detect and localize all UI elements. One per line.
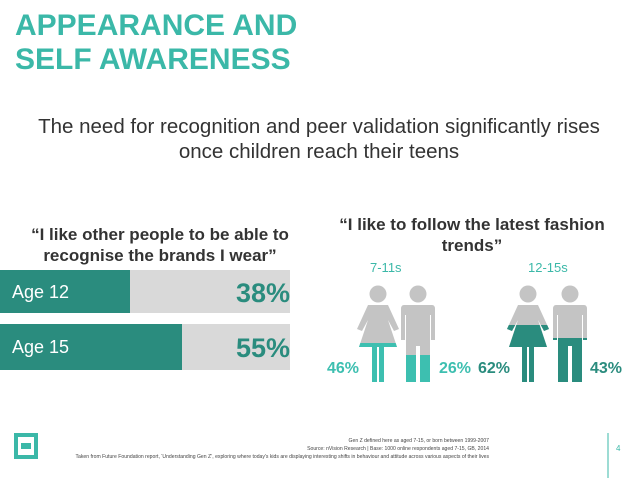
percentages: 62% [478, 360, 510, 377]
quote left: “I like other people to be able to recognise the brands I wear” [31, 225, 289, 265]
logo [14, 433, 38, 459]
quote right: “I like to follow the latest fashion trends” [339, 215, 605, 255]
subtitle: The need for recognition and peer validation significantly rises [38, 115, 600, 138]
percentages: 26% [439, 360, 471, 377]
figure girl 7-11 [357, 286, 399, 382]
footnotes [76, 438, 489, 460]
footnotes: Gen Z defined here as aged 7-15, or born between 1999-2007 [349, 438, 489, 444]
text: 12-15s [528, 260, 568, 275]
bar: age 12 [0, 270, 290, 313]
bar: age 12: Age 12 [12, 282, 69, 302]
title: SELF AWARENESS [15, 43, 291, 76]
figure boy 7-11 [401, 286, 435, 382]
title [15, 9, 297, 76]
footnotes: Source: nVision Research | Base: 1000 online respondents aged 7-15, GB, 2014 [307, 446, 489, 452]
bar: age 15 [0, 324, 290, 370]
title: APPEARANCE AND [15, 9, 297, 42]
subtitle: once children reach their teens [179, 140, 459, 163]
page number: 4 [616, 444, 620, 453]
age labels: 7-11s [370, 260, 402, 275]
bar: age 15: 55% [236, 333, 290, 363]
figure girl 12-15 [507, 286, 549, 382]
subtitle [38, 115, 600, 163]
bar: age 15: Age 15 [12, 337, 69, 357]
percentages: 46% [327, 360, 359, 377]
bar: age 12: 38% [236, 278, 290, 308]
percentages [327, 360, 622, 377]
figures chart [14, 286, 622, 478]
percentages: 43% [590, 360, 622, 377]
figure boy 12-15 [553, 286, 587, 382]
footnotes: Taken from Future Foundation report, ‘Understanding Gen Z’, exploring where today's kids are displaying interesting shifts in behaviour and attitude across various aspects of their lives [76, 454, 489, 460]
